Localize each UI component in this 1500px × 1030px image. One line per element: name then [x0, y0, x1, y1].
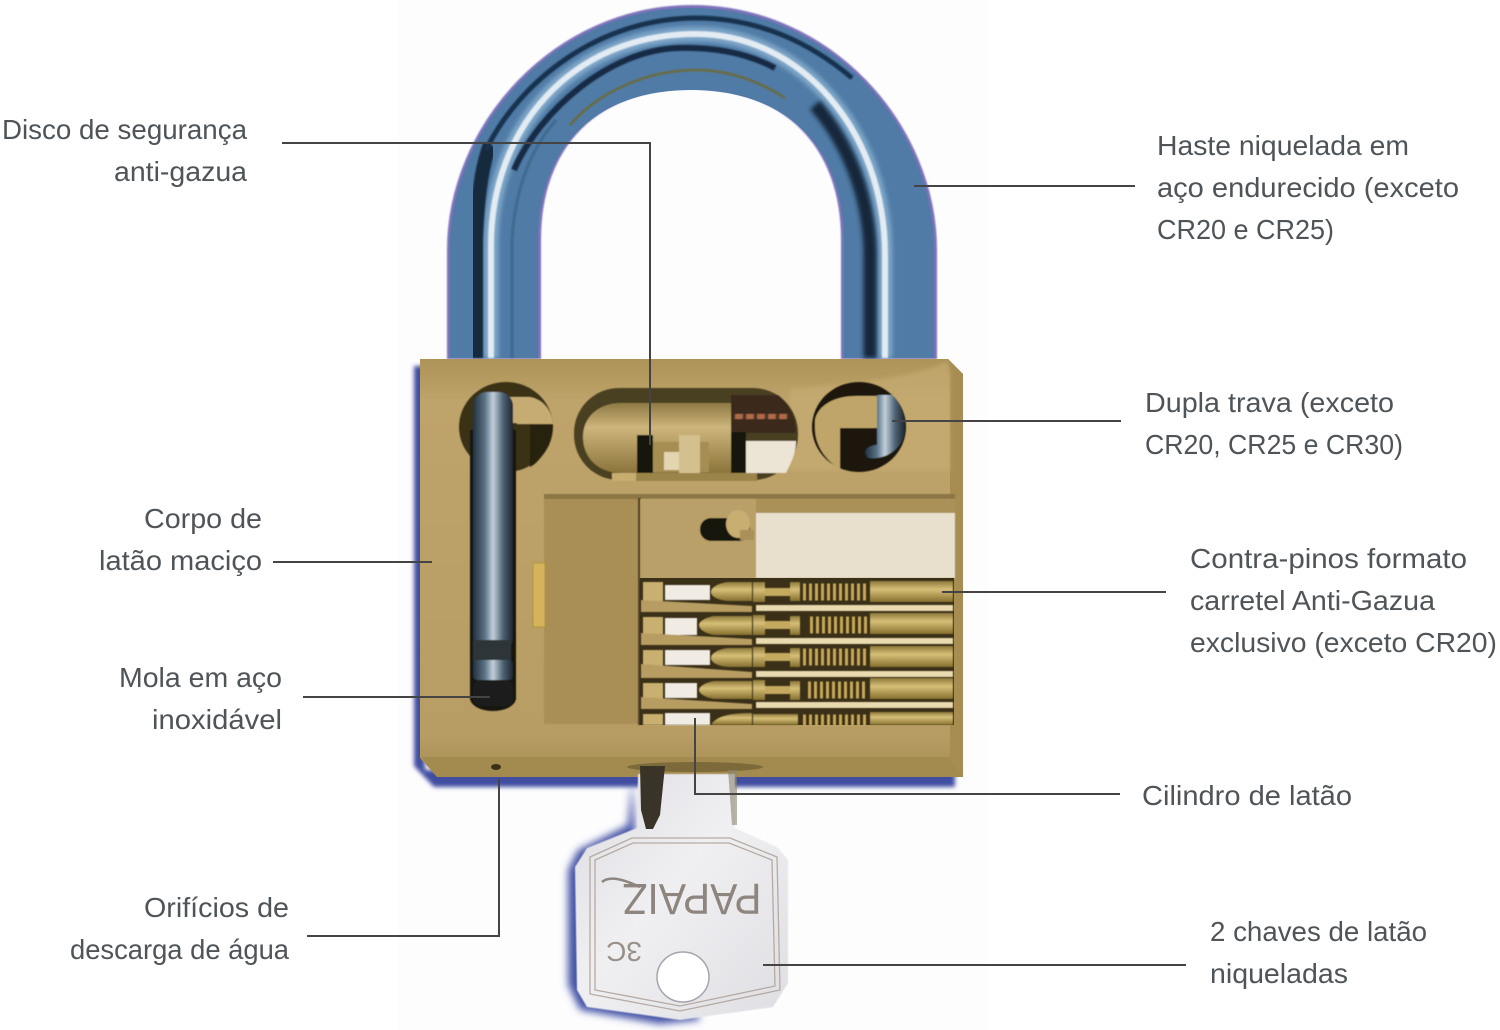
key engraved border [590, 838, 780, 1011]
right bolt chamber [812, 382, 906, 472]
callout: contra-pinos: carretel Anti-Gazua [1190, 585, 1435, 616]
callout: dupla trava: Dupla trava (exceto [1145, 387, 1394, 418]
callout: mola em aço: Mola em aço [119, 662, 282, 693]
pin row 4 [641, 678, 953, 709]
callout: haste niquelada: Haste niquelada em [1157, 130, 1409, 161]
callout: orifícios de descarga [70, 779, 499, 965]
pin row 1 [641, 581, 953, 612]
key number: 3C [606, 936, 642, 967]
callout: cilindro de latão [695, 718, 1352, 811]
left bolt chamber [459, 382, 553, 711]
body block [420, 359, 963, 777]
callout: haste niquelada: aço endurecido (exceto [1157, 172, 1459, 203]
callout: mola em aço [119, 662, 490, 735]
padlock body [414, 359, 963, 787]
key hole [657, 952, 709, 1002]
callout: orifícios de descarga: descarga de água [70, 934, 289, 965]
body shadow [414, 366, 955, 787]
photo backdrop [398, 0, 988, 1030]
lower cavity: left recess [533, 494, 955, 725]
callout: contra-pinos: Contra-pinos formato [1190, 543, 1467, 574]
callout: 2 chaves: niqueladas [1210, 958, 1348, 989]
padlock shackle [448, 6, 936, 358]
key [568, 766, 788, 1024]
pin row 3 [641, 646, 953, 678]
callout: cilindro de latão: Cilindro de latão [1142, 780, 1352, 811]
callout: disco de segurança: Disco de segurança [2, 114, 247, 145]
callout: haste niquelada [914, 130, 1459, 245]
callout: dupla trava: CR20, CR25 e CR30) [1145, 429, 1403, 460]
callout: 2 chaves [763, 916, 1427, 989]
callout: contra-pinos [942, 543, 1497, 658]
middle lock chamber [574, 388, 798, 481]
pin cavity background [640, 578, 954, 725]
callout: mola em aço: inoxidável [152, 704, 282, 735]
callout: 2 chaves: 2 chaves de latão [1210, 916, 1427, 947]
callout: corpo de latão: Corpo de [144, 503, 262, 534]
callout: disco de segurança [2, 114, 650, 445]
callout: dupla trava [892, 387, 1403, 460]
callout: corpo de latão [99, 503, 432, 576]
key blade and head [575, 774, 788, 1020]
pin row 2 [641, 613, 953, 645]
key shadow [568, 780, 700, 1024]
callout: disco de segurança: anti-gazua [114, 156, 247, 187]
callout: orifícios de descarga: Orifícios de [144, 892, 289, 923]
key groove [640, 766, 665, 829]
cylinder plug [640, 499, 955, 579]
callout: contra-pinos: exclusivo (exceto CR20) [1190, 627, 1497, 658]
water drain hole [491, 764, 501, 770]
key brand text: PAPAIZ [622, 874, 762, 923]
callout: corpo de latão: latão maciço [99, 545, 262, 576]
key brand swash [602, 879, 640, 887]
keyway [627, 762, 763, 772]
pin row 5 [643, 712, 953, 725]
callout: haste niquelada: CR20 e CR25) [1157, 214, 1334, 245]
